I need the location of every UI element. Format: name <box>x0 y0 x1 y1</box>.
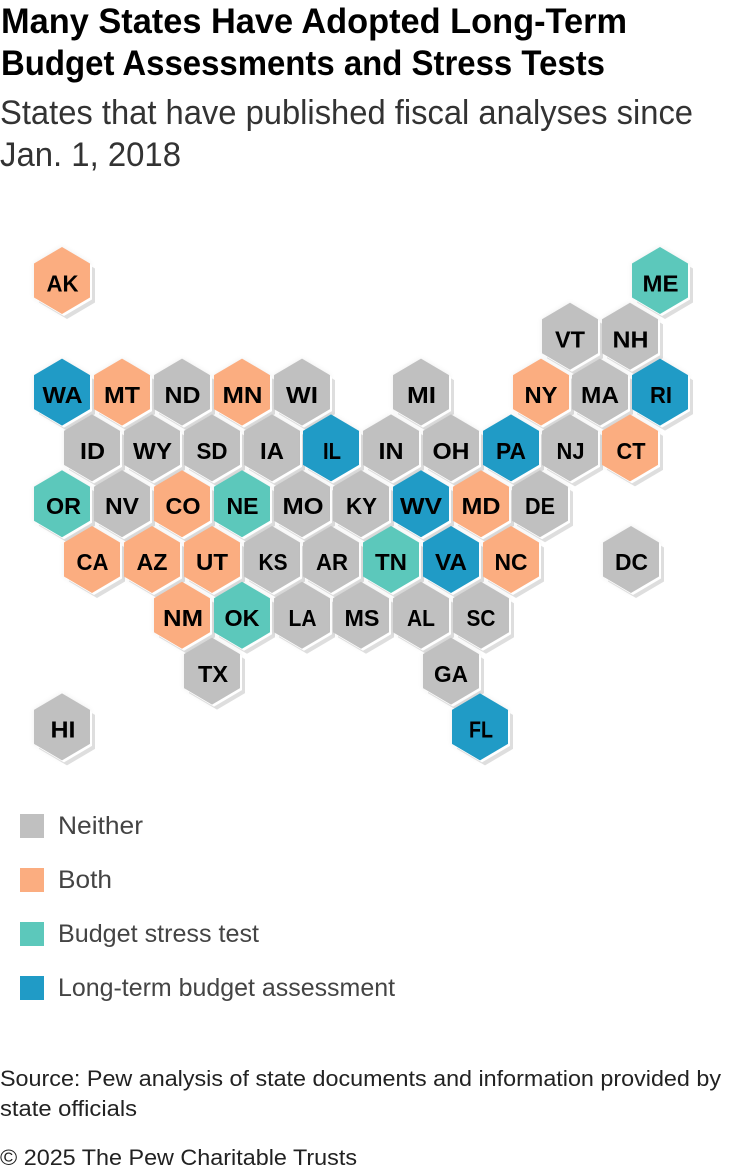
state: GA <box>423 638 484 710</box>
state: NM: NM <box>163 605 203 631</box>
state: IA: IA <box>260 438 284 464</box>
state: NC <box>483 526 544 598</box>
legend item: Neither <box>20 812 143 840</box>
state: WV <box>393 470 454 542</box>
state: NY <box>513 359 574 431</box>
state: MT: MT <box>104 382 141 408</box>
state: OR <box>34 470 95 542</box>
state: PA <box>483 414 544 486</box>
state: NV <box>94 470 155 542</box>
state: NE <box>214 470 275 542</box>
state: OK: OK <box>224 605 260 631</box>
state: FL: FL <box>469 716 493 742</box>
state: NH: NH <box>612 326 648 352</box>
state: AZ <box>124 526 185 598</box>
state: KS <box>244 526 305 598</box>
state: CT <box>602 414 663 486</box>
state: TX <box>184 638 245 710</box>
state: HI <box>34 693 95 765</box>
state: MD <box>453 470 514 542</box>
state: RI: RI <box>650 382 672 408</box>
state: SD <box>184 414 245 486</box>
state: SD: SD <box>196 438 228 464</box>
state: NC: NC <box>494 549 528 575</box>
state: DE: DE <box>525 493 555 519</box>
state: ND <box>154 359 215 431</box>
state: NE: NE <box>226 493 258 519</box>
state: KS: KS <box>258 549 288 575</box>
state: MI <box>393 359 454 431</box>
state: NJ: NJ <box>556 438 584 464</box>
hexagon tile map of states <box>34 247 693 765</box>
subtitle: Jan. 1, 2018 <box>0 136 181 174</box>
state: DC <box>603 526 664 598</box>
state: DC: DC <box>615 549 648 575</box>
state: AR <box>303 526 364 598</box>
state: MA: MA <box>581 382 619 408</box>
state: MA <box>572 359 633 431</box>
state: MT <box>94 359 155 431</box>
state: VA <box>423 526 484 598</box>
legend item: Both <box>20 866 112 894</box>
title: Many States Have Adopted Long-Term <box>1 2 627 41</box>
state: ID: ID <box>80 438 105 464</box>
state: CA: CA <box>76 549 109 575</box>
state: IN: IN <box>378 438 404 464</box>
state: ME <box>632 247 693 319</box>
state: ME: ME <box>642 270 678 296</box>
state: CT: CT <box>616 438 646 464</box>
state: AL: AL <box>407 605 435 631</box>
source note: Source: Pew analysis of state documents and information provided by <box>0 1066 722 1091</box>
subtitle: States that have published fiscal analyses since <box>0 94 693 132</box>
state: AK: AK <box>46 270 79 296</box>
state: MN: MN <box>222 382 262 408</box>
state: GA: GA <box>434 661 468 687</box>
state: IL <box>303 414 364 486</box>
legend item: Neither: Neither <box>58 812 143 840</box>
title: Budget Assessments and Stress Tests <box>1 44 605 83</box>
copyright: © 2025 The Pew Charitable Trusts <box>0 1145 357 1170</box>
state: VA: VA <box>435 549 467 575</box>
state: WI <box>274 359 335 431</box>
state: SC: SC <box>466 605 496 631</box>
state: AK <box>34 247 95 319</box>
state: MI: MI <box>407 382 436 408</box>
state: AR: AR <box>316 549 348 575</box>
state: MD: MD <box>462 493 500 519</box>
state: AL <box>393 582 454 654</box>
state: TX: TX <box>198 661 228 687</box>
state: WV: WV <box>400 493 442 519</box>
state: TN <box>363 526 424 598</box>
legend item: Long-term budget assessment: Long-term budget assessment <box>58 974 395 1002</box>
state: MS: MS <box>344 605 380 631</box>
source note: state officials <box>0 1096 137 1121</box>
state: MO: MO <box>282 493 324 519</box>
title <box>1 2 627 83</box>
state: NM <box>154 582 215 654</box>
state: OK <box>214 582 275 654</box>
state: TN: TN <box>375 549 407 575</box>
state: WA <box>34 359 95 431</box>
state: PA: PA <box>496 438 526 464</box>
state: NV: NV <box>105 493 139 519</box>
state: LA: LA <box>288 605 317 631</box>
state: AZ: AZ <box>136 549 168 575</box>
state: WI: WI <box>286 382 318 408</box>
state: FL <box>452 693 513 765</box>
state: VT <box>542 303 603 375</box>
legend <box>20 812 395 1002</box>
state: OH: OH <box>432 438 470 464</box>
state: ND: ND <box>164 382 200 408</box>
state: CA <box>64 526 125 598</box>
subtitle <box>0 94 693 174</box>
state: LA <box>274 582 335 654</box>
state: NY: NY <box>524 382 558 408</box>
state: DE <box>512 470 573 542</box>
state: MO <box>274 470 335 542</box>
state: OH <box>423 414 484 486</box>
legend item: Budget stress test: Budget stress test <box>58 920 259 948</box>
state: WY <box>124 414 185 486</box>
state: HI: HI <box>50 716 76 742</box>
source note <box>0 1066 722 1121</box>
state: WA: WA <box>42 382 83 408</box>
state: IL: IL <box>323 438 341 464</box>
state: SC <box>453 582 514 654</box>
state: UT: UT <box>196 549 229 575</box>
state: OR: OR <box>46 493 81 519</box>
state: VT: VT <box>555 326 586 352</box>
state: IN <box>363 414 424 486</box>
state: CO <box>154 470 215 542</box>
state: KY: KY <box>346 493 377 519</box>
legend item: Both: Both <box>58 866 112 894</box>
state: NJ <box>542 414 603 486</box>
state: NH <box>602 303 663 375</box>
state: CO: CO <box>166 493 200 519</box>
state: RI <box>632 359 693 431</box>
state: MN <box>214 359 275 431</box>
state: WY: WY <box>133 438 172 464</box>
state: ID <box>64 414 125 486</box>
state: KY <box>333 470 394 542</box>
state: IA <box>244 414 305 486</box>
state: UT <box>184 526 245 598</box>
state: MS <box>333 582 394 654</box>
